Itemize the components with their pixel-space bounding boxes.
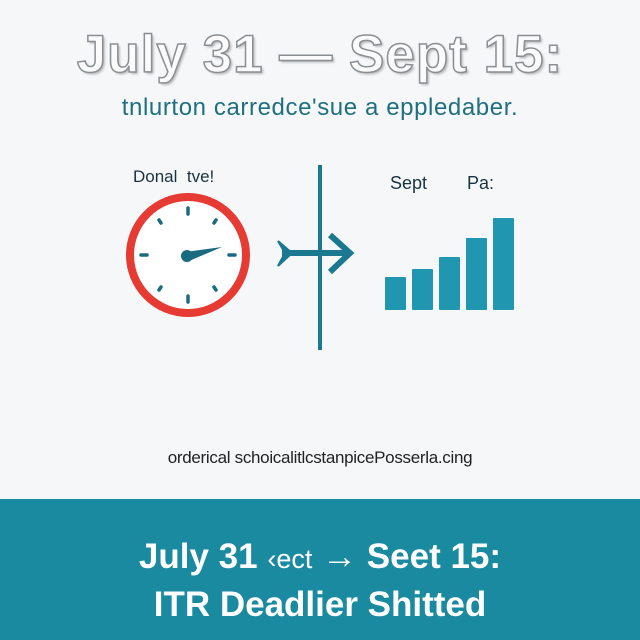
banner headline bbox=[139, 537, 501, 624]
arrow bbox=[278, 235, 350, 272]
divider line bbox=[318, 165, 322, 350]
banner headline: July 31 ‹ect → Seet 15: bbox=[139, 537, 501, 576]
label: clock: Donal tve! bbox=[133, 167, 214, 186]
bar chart bbox=[385, 218, 514, 310]
subtitle: tnlurton carredce'sue a eppledaber. bbox=[122, 94, 518, 121]
label: chart: Sept Pa: bbox=[390, 173, 494, 193]
banner headline: ITR Deadlier Shitted bbox=[154, 585, 486, 624]
caption: orderical schoicalitlcstanpicePosserla.cing bbox=[168, 448, 472, 467]
icon: clock bbox=[130, 197, 246, 313]
title: July 31 — Sept 15: bbox=[77, 25, 563, 84]
footer banner bbox=[0, 499, 640, 640]
